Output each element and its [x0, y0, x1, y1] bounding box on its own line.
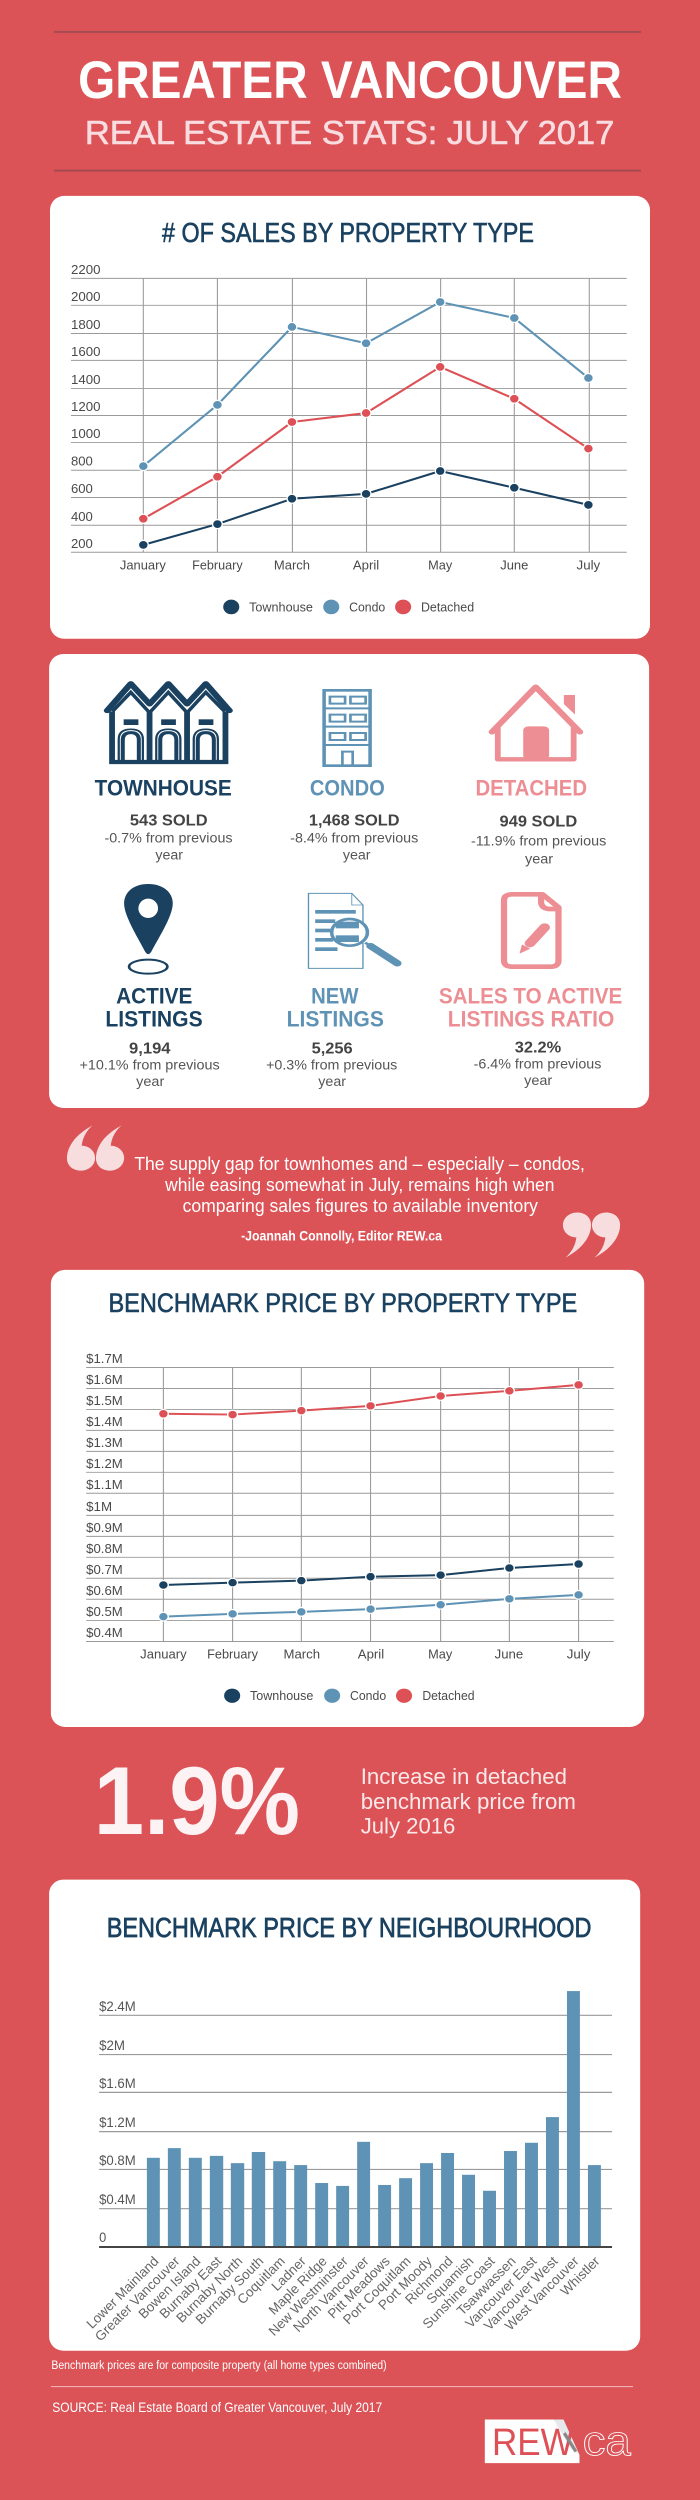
label: townhouse: TOWNHOUSE	[95, 775, 232, 801]
change: active listings	[79, 1057, 220, 1089]
y axis labels: $1.6M	[99, 2076, 136, 2091]
x axis labels: neighbourhood names: New Westminster	[266, 2253, 351, 2339]
series: townhouse	[158, 1560, 583, 1589]
series: condo	[158, 1591, 583, 1621]
change: ratio: -6.4% from previous	[474, 1056, 601, 1072]
series: detached	[158, 1381, 583, 1419]
x axis labels: neighbourhood names: Burnaby East	[157, 2253, 225, 2321]
header	[54, 32, 641, 171]
y axis labels: $0.7M	[86, 1563, 123, 1577]
callout text: July 2016	[361, 1814, 455, 1839]
y axis labels: $0.9M	[86, 1521, 123, 1535]
y axis labels: $0.5M	[86, 1605, 123, 1619]
icon: document with pencil	[504, 894, 558, 967]
label: active listings	[105, 983, 203, 1032]
y axis labels: 1200	[71, 400, 101, 414]
y axis labels: 400	[71, 509, 93, 524]
x axis labels: neighbourhood names: Whistler	[558, 2253, 603, 2299]
y axis labels: $1.4M	[86, 1415, 123, 1429]
y axis labels: 1600	[71, 344, 101, 359]
bar chart: neighbourhoods	[99, 1991, 612, 2247]
x axis labels: June	[495, 1647, 523, 1661]
x axis labels: neighbourhood names: Burnaby North	[173, 2254, 245, 2326]
label: new listings	[287, 983, 384, 1032]
heading: sales chart: # OF SALES BY PROPERTY TYPE	[162, 218, 534, 249]
x axis labels: March	[283, 1647, 320, 1661]
heading: benchmark price chart: BENCHMARK PRICE BY PROPERTY TYPE	[108, 1287, 577, 1317]
x axis labels: February	[207, 1647, 258, 1661]
label: active listings: LISTINGS	[105, 1006, 203, 1032]
legend: Detached	[421, 600, 474, 614]
x axis labels: neighbourhood names: Vancouver East	[462, 2253, 540, 2331]
y axis labels: 2200	[71, 262, 101, 277]
series: condo	[138, 298, 593, 471]
x axis labels: neighbourhood names: Maple Ridge	[266, 2254, 330, 2318]
x axis labels: neighbourhood names: Bowen Island	[135, 2254, 203, 2321]
change: detached: year	[525, 851, 554, 867]
x axis labels: neighbourhood names: Squamish	[424, 2254, 477, 2307]
y axis labels: 600	[71, 482, 93, 496]
panel: benchmark price by property type	[51, 1270, 644, 1727]
panel: benchmark price by neighbourhood	[49, 1880, 640, 2351]
y axis labels: $1.1M	[86, 1478, 123, 1492]
quote text: The supply gap for townhomes and – especially – condos,	[134, 1154, 585, 1175]
callout text: Increase in detached	[361, 1764, 567, 1789]
series: detached	[138, 362, 593, 523]
series: townhouse	[138, 467, 593, 549]
x axis labels: neighbourhood names: Vancouver West	[481, 2253, 561, 2333]
footer	[51, 2359, 633, 2464]
label: detached: DETACHED	[475, 775, 587, 801]
x axis labels: March	[274, 558, 310, 572]
line chart: benchmark price	[86, 1352, 614, 1703]
x axis labels: neighbourhood names: Sunshine Coast	[420, 2253, 498, 2332]
x axis labels: July	[577, 558, 600, 572]
label: condo: CONDO	[310, 775, 385, 801]
x axis labels: neighbourhood names: Richmond	[402, 2254, 456, 2307]
change: condo: -8.4% from previous	[290, 830, 418, 846]
y axis labels: 1000	[71, 427, 101, 441]
x axis labels	[120, 558, 600, 572]
y axis labels: 1400	[71, 373, 101, 387]
change: active listings: year	[136, 1073, 165, 1089]
icon: opening quotation mark	[67, 1126, 124, 1171]
change: townhouse: year	[155, 847, 183, 863]
label: new listings: NEW	[311, 983, 359, 1009]
y axis labels: 800	[71, 454, 93, 469]
x axis labels: May	[428, 1647, 452, 1661]
value: detached sold: 949 SOLD	[500, 813, 577, 831]
y axis labels: 1800	[71, 318, 101, 332]
x axis labels: April	[358, 1647, 384, 1661]
x axis labels: neighbourhood names: Lower Mainland	[84, 2254, 162, 2332]
quote text: while easing somewhat in July, remains high when	[164, 1175, 554, 1196]
x axis labels: February	[192, 558, 243, 572]
y axis labels: $0.8M	[86, 1542, 123, 1556]
callout text	[361, 1764, 576, 1839]
change: ratio	[474, 1056, 601, 1088]
stat: new listings	[266, 893, 397, 1089]
stat: sales to active listings ratio	[439, 894, 622, 1088]
legend: Condo	[350, 1689, 386, 1703]
x axis labels: neighbourhood names: Greater Vancouver	[92, 2253, 183, 2344]
y axis labels: $0.6M	[86, 1584, 123, 1598]
change: new listings	[266, 1057, 397, 1089]
x axis labels: neighbourhood names: West Vancouver	[502, 2253, 582, 2333]
icon: house	[492, 687, 580, 760]
footnote: Benchmark prices are for composite property (all home types combined)	[51, 2359, 387, 2372]
icon: closing quotation mark	[563, 1213, 620, 1258]
label: sales to active listings ratio	[439, 983, 622, 1032]
y axis labels: 2000	[71, 289, 101, 304]
change: active listings: +10.1% from previous	[79, 1057, 220, 1073]
panel: sales by property type	[50, 196, 650, 639]
logo: REW.ca	[485, 2419, 632, 2464]
change: detached	[471, 833, 606, 867]
line chart: sales	[71, 262, 627, 614]
y axis labels: $0.4M	[99, 2191, 136, 2207]
label: active listings: ACTIVE	[116, 983, 192, 1009]
legend: Townhouse	[249, 600, 313, 614]
icon: condo building	[324, 690, 370, 766]
y axis labels: $1.5M	[86, 1394, 123, 1408]
icon: map pin	[124, 884, 173, 974]
x axis labels: neighbourhood names: Coquitlam	[234, 2254, 288, 2307]
x axis labels: April	[353, 558, 379, 572]
y axis labels: $2M	[99, 2038, 125, 2053]
label: sales to active listings ratio: SALES TO ACTIVE	[439, 983, 622, 1009]
change: condo	[290, 830, 418, 863]
value: townhouse sold: 543 SOLD	[130, 812, 208, 830]
change: new listings: +0.3% from previous	[266, 1057, 397, 1073]
y axis labels	[71, 262, 101, 551]
icon: document with magnifier	[308, 893, 397, 968]
x axis labels: June	[500, 558, 528, 572]
icon: townhouses	[107, 684, 229, 762]
callout text: benchmark price from	[361, 1789, 576, 1814]
x axis labels: January	[140, 1647, 187, 1661]
x axis labels: neighbourhood names: Port Moody	[375, 2253, 435, 2313]
x axis labels	[140, 1647, 591, 1661]
x axis labels: neighbourhood names: North Vancouver	[290, 2253, 372, 2335]
value: new listings: 5,256	[312, 1040, 353, 1058]
x axis labels: neighbourhood names: Ladner	[268, 2253, 309, 2294]
change: condo: year	[343, 847, 371, 863]
heading: neighbourhood chart: BENCHMARK PRICE BY NEIGHBOURHOOD	[107, 1912, 592, 1943]
change: townhouse: -0.7% from previous	[104, 830, 233, 846]
source: SOURCE: Real Estate Board of Greater Vancouver, July 2017	[52, 2399, 382, 2415]
label: new listings: LISTINGS	[287, 1006, 384, 1032]
x axis labels: neighbourhood names: Pitt Meadows	[325, 2253, 393, 2321]
x axis labels: neighbourhood names: Port Coquitlam	[340, 2254, 414, 2327]
logo: REW.ca: REW	[492, 2421, 574, 2463]
y axis labels: 0	[99, 2230, 106, 2245]
value: active listings: 9,194	[129, 1040, 171, 1058]
big number: 1.9%	[94, 1747, 300, 1855]
x axis labels: May	[428, 558, 452, 572]
y axis labels: $1.6M	[86, 1373, 123, 1387]
y axis labels: 200	[71, 537, 93, 551]
stat: townhouse	[95, 684, 233, 863]
legend	[224, 1689, 475, 1703]
value: condo sold: 1,468 SOLD	[309, 812, 400, 830]
label: sales to active listings ratio: LISTINGS RATIO	[448, 1006, 614, 1032]
quote text	[134, 1154, 585, 1217]
x axis labels: neighbourhood names: Tsawwassen	[454, 2254, 519, 2318]
y axis labels: $1M	[86, 1500, 112, 1514]
value: ratio: 32.2%	[515, 1039, 561, 1057]
y axis labels: $0.4M	[86, 1626, 123, 1640]
y axis labels: $1.2M	[99, 2114, 136, 2130]
y axis labels: $0.8M	[99, 2153, 136, 2168]
change: new listings: year	[318, 1073, 346, 1089]
quote text: comparing sales figures to available inventory	[183, 1196, 538, 1217]
subtitle: REAL ESTATE STATS: JULY 2017	[85, 115, 614, 152]
change: townhouse	[104, 830, 233, 863]
legend	[223, 600, 474, 614]
legend: Detached	[422, 1689, 475, 1703]
quote attribution: -Joannah Connolly, Editor REW.ca	[241, 1228, 442, 1244]
legend: Condo	[349, 600, 386, 614]
stat: detached	[471, 687, 606, 867]
change: detached: -11.9% from previous	[471, 833, 606, 849]
stat: condo	[290, 690, 418, 863]
y axis labels: $1.3M	[86, 1436, 123, 1450]
logo: REW.ca: ca	[583, 2419, 632, 2464]
x axis labels: January	[120, 558, 166, 572]
y axis labels: $2.4M	[99, 1998, 136, 2014]
y axis labels	[86, 1352, 123, 1640]
x axis labels: neighbourhood names	[84, 2253, 603, 2344]
y axis labels	[99, 1998, 136, 2245]
stat: active listings	[79, 884, 220, 1089]
x axis labels: neighbourhood names: Burnaby South	[193, 2254, 266, 2327]
y axis labels: $1.7M	[86, 1352, 123, 1366]
x axis labels: July	[567, 1647, 591, 1661]
bars	[147, 1991, 601, 2247]
y axis labels: $1.2M	[86, 1457, 123, 1471]
quote	[67, 1126, 620, 1258]
callout: 1.9% increase	[94, 1747, 576, 1855]
panel: property type stats	[49, 654, 649, 1108]
change: ratio: year	[524, 1072, 553, 1088]
legend: Townhouse	[250, 1689, 313, 1703]
